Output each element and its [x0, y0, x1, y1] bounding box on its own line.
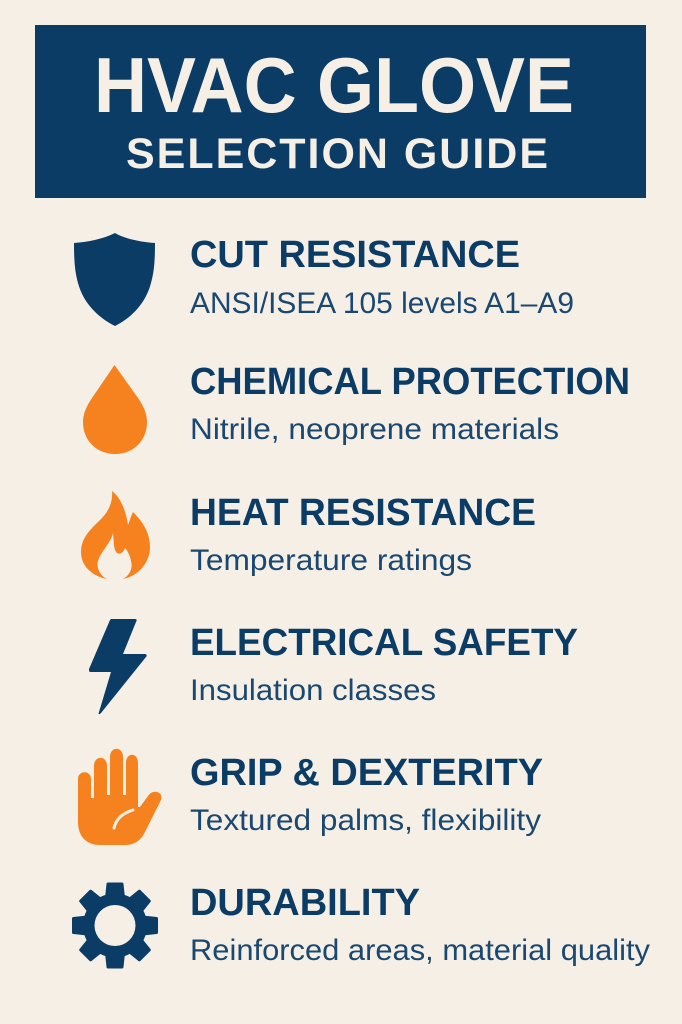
text: cut resistance detail: ANSI/ISEA 105 levels A1–A9 [190, 287, 574, 320]
icon: hand [78, 749, 161, 845]
text: durability detail: Reinforced areas, material quality [190, 934, 650, 967]
heading: heat resistance: HEAT RESISTANCE [190, 492, 536, 534]
heading: electrical safety: ELECTRICAL SAFETY [190, 622, 578, 664]
icon: drop [83, 365, 147, 454]
title banner [35, 25, 646, 198]
item: electrical safety [89, 619, 578, 714]
item: heat resistance [81, 491, 536, 579]
item: cut resistance [74, 233, 574, 326]
icon: lightning bolt [89, 619, 147, 714]
item: durability [74, 882, 650, 967]
text: grip and dexterity detail: Textured palms, flexibility [190, 804, 541, 837]
heading: durability: DURABILITY [190, 882, 420, 924]
text: electrical safety detail: Insulation classes [190, 674, 436, 707]
item: grip and dexterity [78, 749, 543, 845]
item: chemical protection [83, 361, 630, 454]
text: heat resistance detail: Temperature ratings [190, 544, 472, 577]
icon: gear [74, 884, 156, 967]
heading: chemical protection: CHEMICAL PROTECTION [190, 361, 630, 403]
icon: shield [74, 233, 155, 326]
text: chemical protection detail: Nitrile, neoprene materials [190, 413, 559, 446]
heading: cut resistance: CUT RESISTANCE [190, 234, 520, 276]
subtitle: SELECTION GUIDE [126, 130, 548, 178]
title: HVAC GLOVE [94, 41, 574, 129]
heading: grip and dexterity: GRIP & DEXTERITY [190, 752, 543, 794]
icon: flame [81, 491, 150, 579]
